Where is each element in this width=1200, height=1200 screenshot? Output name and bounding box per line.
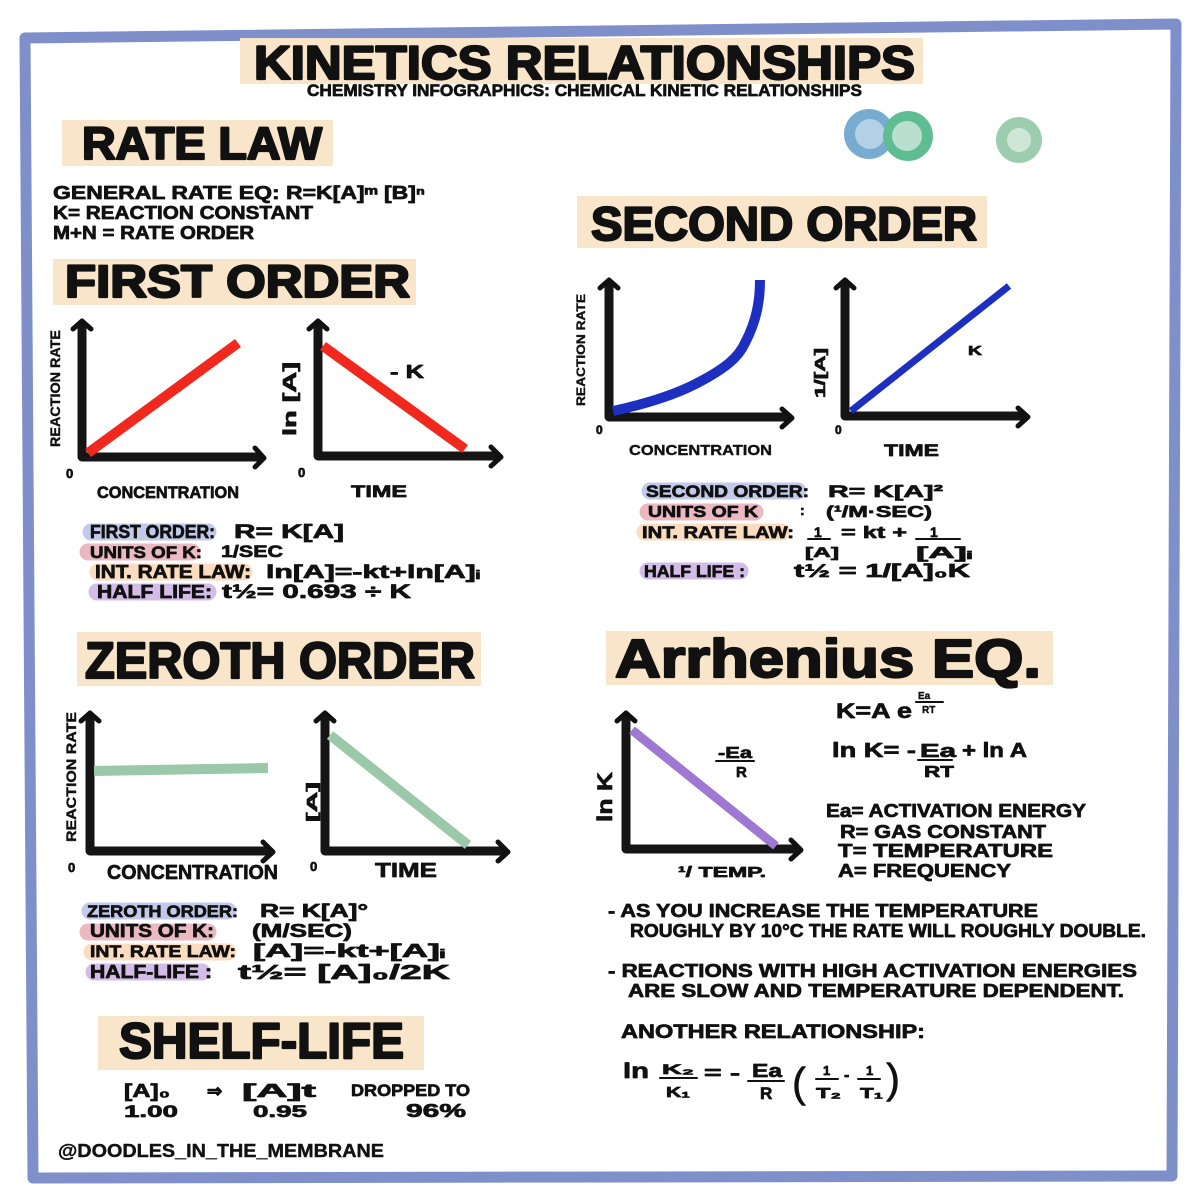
another relationship equation: T₁: [860, 1085, 883, 1102]
temperature notes: - REACTIONS WITH HIGH ACTIVATION ENERGIES: [608, 961, 1137, 981]
second order summary: INT. RATE LAW:: [642, 523, 794, 542]
heading: arrhenius: Arrhenius EQ.: [615, 629, 1041, 689]
chart: zeroth order [A] vs time: TIME: [375, 860, 437, 882]
chart: first order reaction rate vs concentration: CONCENTRATION: [97, 483, 239, 502]
shelf-life data: 96%: [406, 1101, 466, 1121]
credit: @DOODLES_IN_THE_MEMBRANE: [58, 1141, 384, 1161]
shelf-life data: ⇒: [207, 1081, 222, 1101]
chart: second order 1/[A] vs time: TIME: [884, 441, 939, 460]
zeroth order summary: R= K[A]°: [260, 901, 368, 921]
second order summary: :: [800, 502, 805, 518]
chart: arrhenius ln k vs 1/temp: ln K: [594, 772, 617, 822]
arrhenius equations: + ln A: [962, 740, 1027, 762]
rate law text: GENERAL RATE EQ: R=K[A]ᵐ [B]ⁿ: [53, 183, 425, 203]
chart: zeroth order [A] vs time: [304, 713, 508, 882]
chart: zeroth order reaction rate vs concentration: CONCENTRATION: [107, 862, 278, 884]
first order summary: ln[A]=-kt+ln[A]ᵢ: [266, 562, 481, 582]
chart: zeroth order [A] vs time: 0: [310, 859, 317, 874]
chart: second order 1/[A] vs time: [812, 280, 1028, 460]
another relationship equation: ln: [623, 1060, 649, 1083]
decorative circles: [844, 109, 1042, 163]
temperature notes: - AS YOU INCREASE THE TEMPERATURE: [608, 901, 1038, 921]
second order summary: [A]: [805, 544, 839, 560]
second order summary: t½ = 1/[A]₀K: [794, 561, 970, 581]
another relationship equation: ): [886, 1055, 900, 1102]
second order summary: 1: [930, 524, 938, 540]
arrhenius definitions: [826, 801, 1086, 881]
chart: second order reaction rate vs concentration: CONCENTRATION: [629, 442, 772, 459]
second order summary: [A]ᵢ: [916, 545, 972, 562]
another relationship equation: -: [844, 1067, 849, 1084]
temperature notes: ROUGHLY BY 10°C THE RATE WILL ROUGHLY DOUBLE.: [630, 921, 1146, 941]
chart: first order ln[A] vs time: [280, 321, 501, 501]
first order summary: [88, 522, 481, 603]
rate law text: K= REACTION CONSTANT: [53, 203, 313, 223]
shelf-life data: DROPPED TO: [351, 1081, 470, 1100]
another relationship equation: Ea: [752, 1061, 783, 1081]
chart: first order ln[A] vs time: 0: [298, 465, 305, 480]
chart: first order reaction rate vs concentration: 0: [66, 466, 73, 481]
first order summary: 1/SEC: [221, 542, 283, 561]
chart: first order reaction rate vs concentration: REACTION RATE: [47, 330, 63, 447]
chart: second order reaction rate vs concentration: REACTION RATE: [574, 294, 588, 406]
another relationship equation: = -: [704, 1063, 740, 1083]
arrhenius definitions: R= GAS CONSTANT: [840, 822, 1046, 842]
rate law text: M+N = RATE ORDER: [53, 223, 254, 243]
chart: second order reaction rate vs concentration: 0: [596, 423, 603, 437]
chart: second order reaction rate vs concentration: [574, 280, 792, 459]
second order summary: SECOND ORDER:: [646, 482, 809, 501]
another relationship equation: ANOTHER RELATIONSHIP:: [621, 1022, 925, 1043]
arrhenius definitions: T= TEMPERATURE: [838, 841, 1053, 861]
chart: zeroth order [A] vs time: [A]: [304, 782, 321, 822]
chart: zeroth order reaction rate vs concentration: 0: [68, 860, 75, 875]
arrhenius equations: Ea: [920, 741, 958, 761]
arrhenius equations: K=A e: [836, 700, 912, 723]
shelf-life data: [A]t: [242, 1081, 316, 1101]
zeroth order summary: ZEROTH ORDER:: [87, 902, 238, 921]
chart: first order ln[A] vs time: ln [A]: [280, 362, 300, 436]
arrhenius equations: RT: [922, 705, 935, 716]
first order summary: HALF LIFE:: [97, 582, 212, 602]
first order summary: R= K[A]: [234, 522, 344, 543]
subtitle: CHEMISTRY INFOGRAPHICS: CHEMICAL KINETIC RELATIONSHIPS: [307, 82, 862, 100]
another relationship equation: 1: [866, 1063, 873, 1078]
another relationship equation: R: [760, 1084, 772, 1103]
first order summary: INT. RATE LAW:: [95, 562, 251, 582]
second order summary: R= K[A]²: [828, 482, 944, 501]
heading: rate law: RATE LAW: [82, 118, 323, 169]
chart: second order 1/[A] vs time: 1/[A]: [812, 348, 829, 398]
chart: zeroth order reaction rate vs concentration: [63, 712, 278, 884]
zeroth order summary: [87, 901, 451, 984]
arrhenius equations: ln K= -: [832, 740, 916, 762]
second order summary: UNITS OF K: [648, 504, 759, 521]
temperature notes: [608, 901, 1146, 1001]
first order summary: FIRST ORDER:: [90, 522, 215, 542]
heading: zeroth order: ZEROTH ORDER: [85, 632, 475, 689]
arrhenius definitions: A= FREQUENCY: [838, 861, 1011, 881]
zeroth order summary: UNITS OF K:: [90, 921, 214, 941]
arrhenius equations: Ea: [918, 691, 931, 702]
zeroth order summary: HALF-LIFE :: [90, 962, 212, 982]
chart: arrhenius ln k vs 1/temp: R: [736, 764, 747, 781]
chart: first order ln[A] vs time: TIME: [351, 482, 407, 501]
second order summary: = kt +: [841, 523, 907, 542]
title: KINETICS RELATIONSHIPS: [254, 36, 915, 89]
another relationship equation: [621, 1022, 925, 1106]
chart: second order 1/[A] vs time: 0: [835, 423, 842, 437]
second order summary: HALF LIFE :: [644, 562, 745, 581]
shelf-life data: 0.95: [253, 1102, 307, 1121]
chart: first order ln[A] vs time: - K: [390, 362, 424, 382]
chart: arrhenius ln k vs 1/temp: -Ea: [718, 745, 752, 762]
shelf-life data: 1.00: [124, 1102, 178, 1121]
zeroth order summary: INT. RATE LAW:: [90, 942, 236, 961]
chart: zeroth order reaction rate vs concentration: REACTION RATE: [63, 712, 79, 842]
arrhenius equations: [832, 691, 1027, 781]
zeroth order summary: [A]=-kt+[A]ᵢ: [253, 941, 446, 961]
temperature notes: ARE SLOW AND TEMPERATURE DEPENDENT.: [628, 981, 1124, 1001]
first order summary: t½= 0.693 ÷ K: [222, 582, 411, 603]
heading: first order: FIRST ORDER: [65, 256, 410, 307]
arrhenius definitions: Ea= ACTIVATION ENERGY: [826, 801, 1086, 821]
heading: shelf-life: SHELF-LIFE: [119, 1013, 404, 1069]
chart: second order 1/[A] vs time: K: [968, 343, 983, 358]
second order summary: [642, 482, 972, 581]
chart: arrhenius ln k vs 1/temp: ¹/ TEMP.: [678, 864, 766, 881]
chart: first order reaction rate vs concentration: [47, 321, 264, 502]
first order summary: UNITS OF K:: [90, 543, 202, 562]
another relationship equation: T₂: [816, 1085, 841, 1102]
second order summary: 1: [814, 524, 822, 540]
another relationship equation: K₁: [666, 1084, 690, 1101]
zeroth order summary: t½= [A]₀/2K: [238, 962, 451, 984]
rate law text: [53, 183, 425, 243]
heading: second order: SECOND ORDER: [591, 197, 977, 250]
arrhenius equations: RT: [924, 764, 954, 781]
chart: arrhenius ln k vs 1/temp: [594, 713, 801, 881]
shelf-life data: [124, 1081, 470, 1121]
shelf-life data: [A]₀: [124, 1081, 170, 1101]
another relationship equation: 1: [823, 1063, 830, 1078]
zeroth order summary: (M/SEC): [252, 921, 352, 941]
another relationship equation: K₂: [662, 1061, 694, 1077]
another relationship equation: (: [792, 1059, 806, 1106]
second order summary: (¹/M·SEC): [826, 504, 932, 521]
